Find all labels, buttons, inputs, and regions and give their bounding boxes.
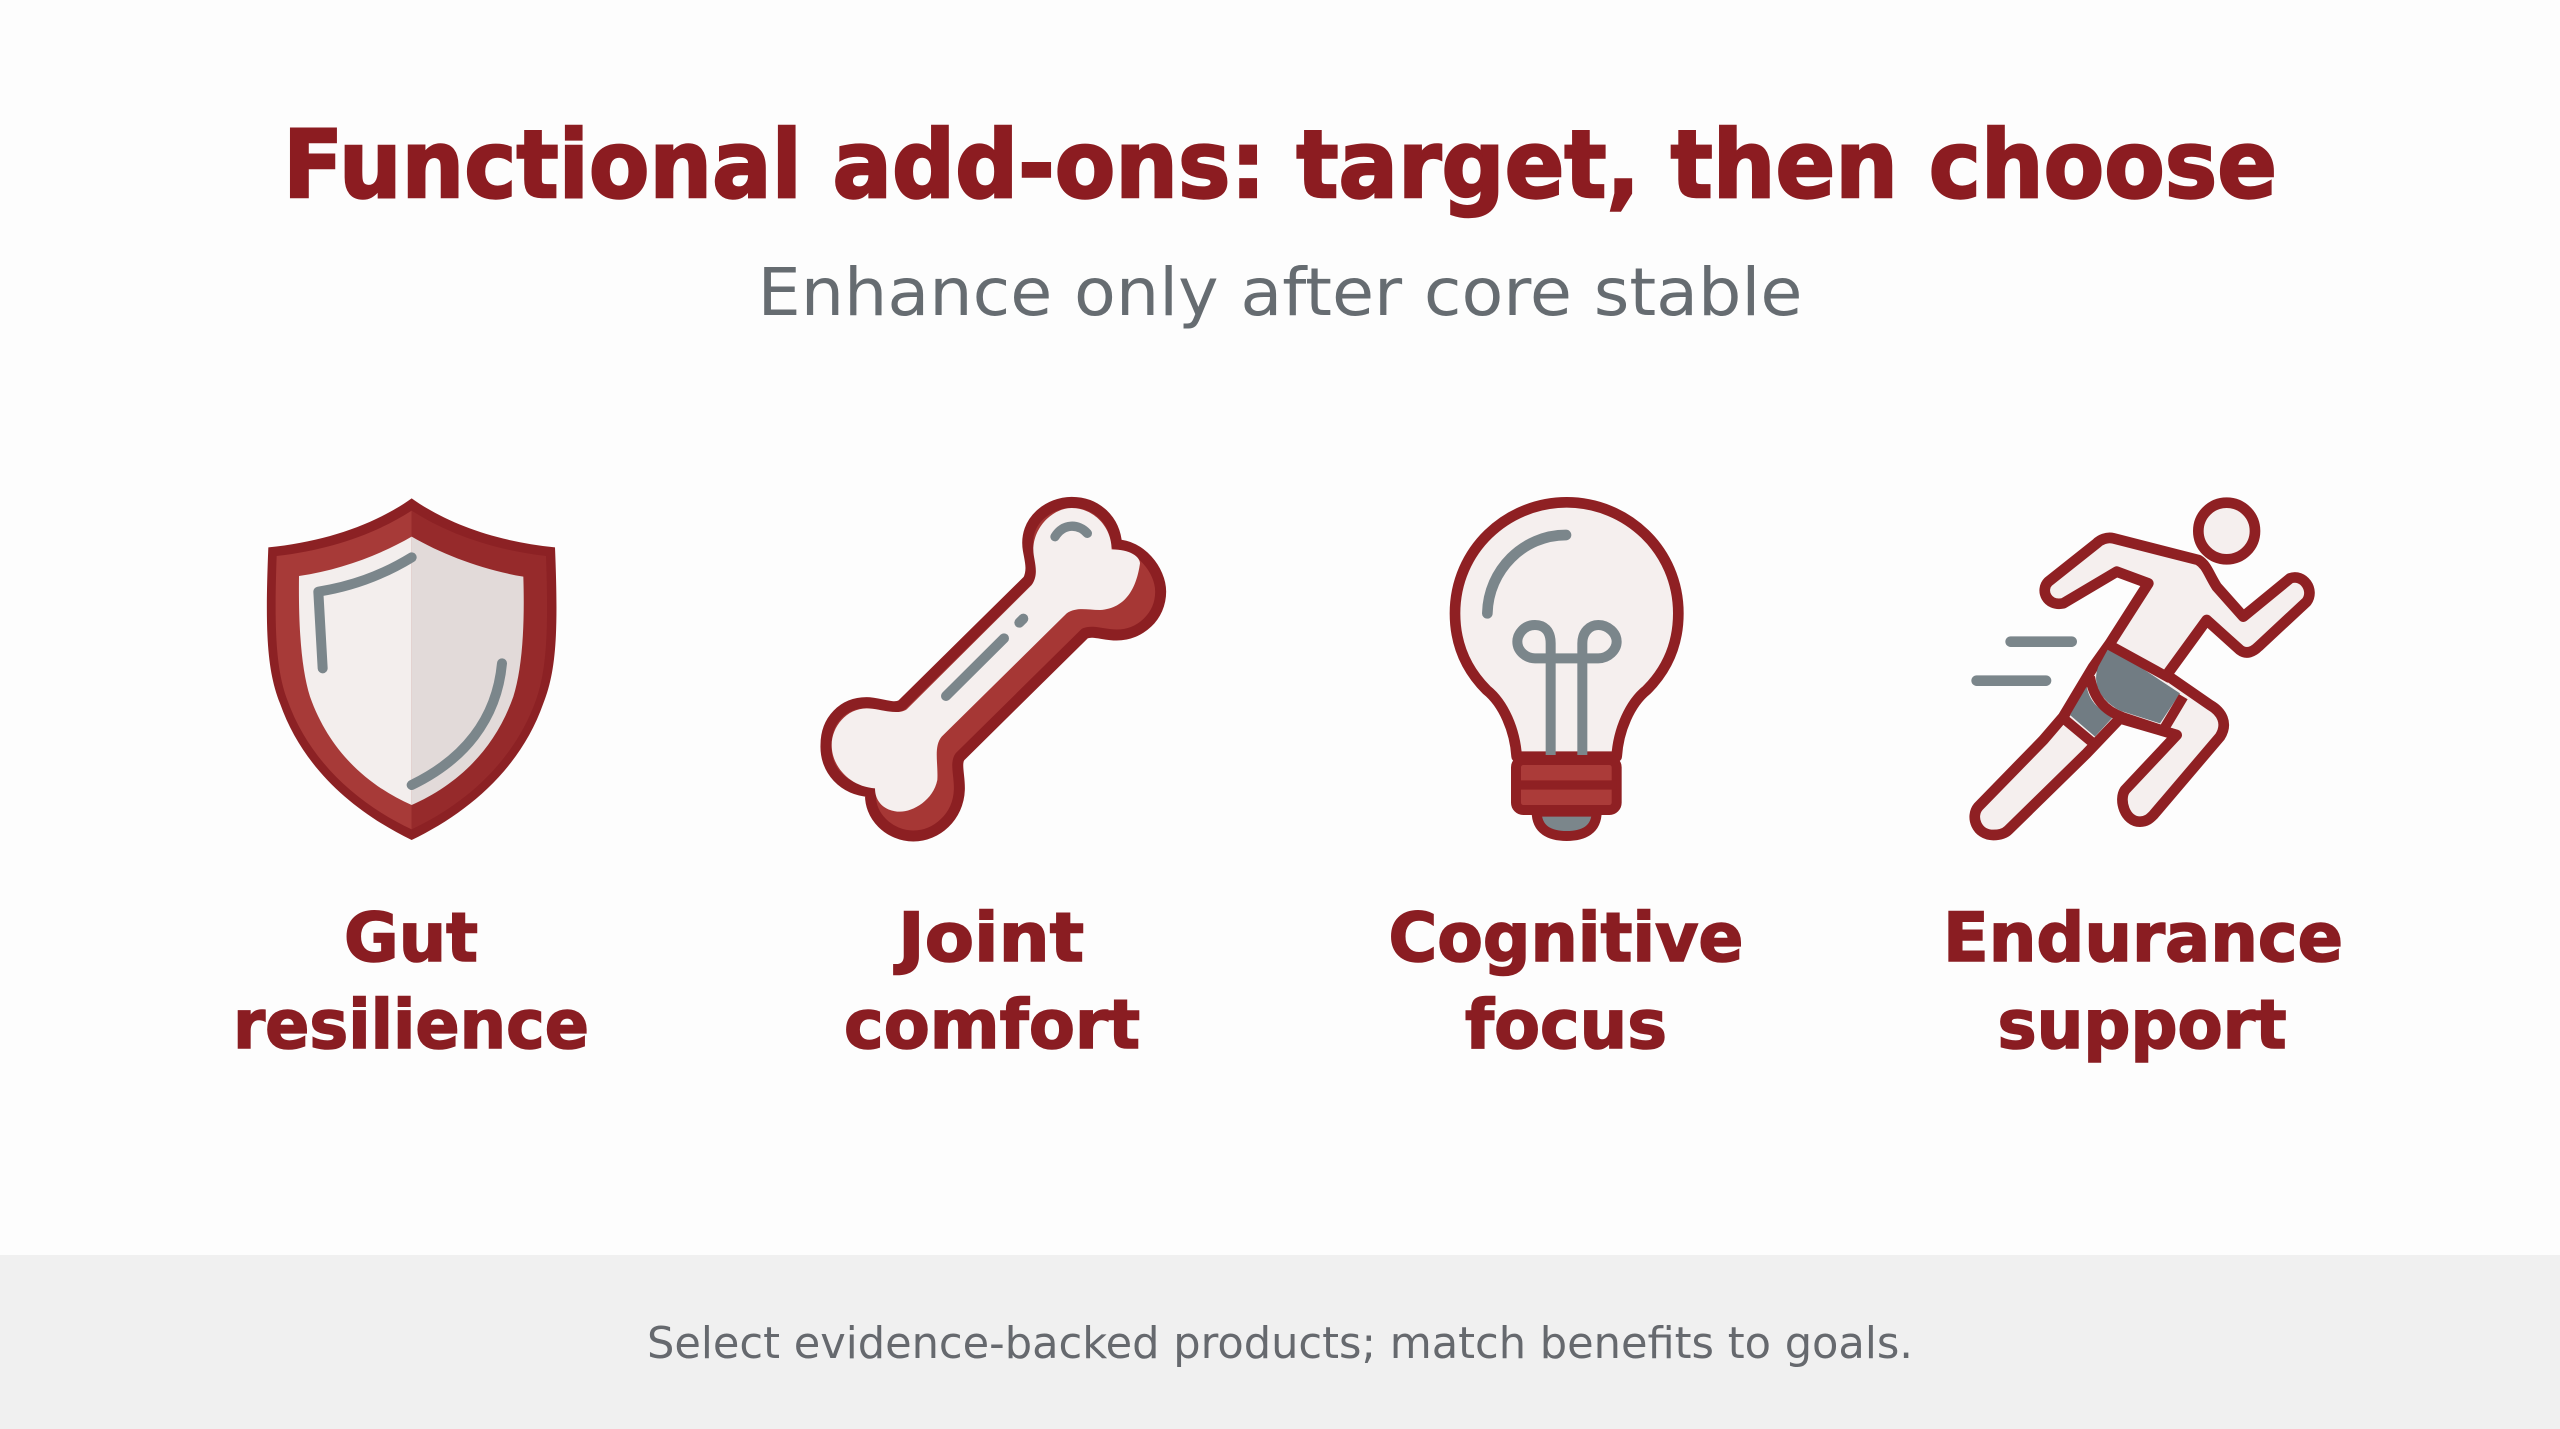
label: gut resilience: resilience xyxy=(233,986,589,1065)
label: gut resilience: Gut xyxy=(344,899,478,978)
label: endurance support: Endurance xyxy=(1943,899,2343,978)
label: endurance support xyxy=(1943,899,2343,1065)
label: gut resilience xyxy=(233,899,589,1065)
icon: bone xyxy=(826,502,1161,836)
label: joint comfort: comfort xyxy=(844,986,1140,1065)
subtitle: Enhance only after core stable xyxy=(758,254,1802,331)
icon: light bulb xyxy=(1455,502,1678,836)
footer band xyxy=(0,1255,2560,1429)
icon: shield xyxy=(267,498,556,840)
footer text: Select evidence-backed products; match benefits to goals. xyxy=(647,1318,1913,1369)
label: joint comfort: Joint xyxy=(894,899,1084,978)
label: cognitive focus: focus xyxy=(1465,986,1667,1065)
title: Functional add-ons: target, then choose xyxy=(283,111,2277,220)
icon: runner xyxy=(1975,503,2309,835)
label: cognitive focus xyxy=(1388,899,1744,1065)
label: joint comfort xyxy=(844,899,1140,1065)
label: cognitive focus: Cognitive xyxy=(1388,899,1744,978)
label: endurance support: support xyxy=(1998,986,2286,1065)
